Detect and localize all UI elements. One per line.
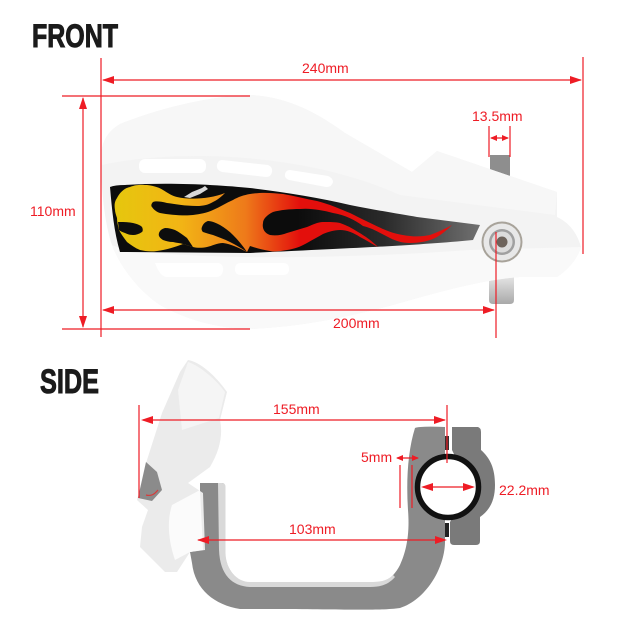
bolt [482, 222, 522, 262]
dimension: 200mm: 200mm [333, 315, 380, 331]
flame decal [110, 184, 480, 253]
clamp ring [418, 456, 478, 518]
silver bracket [190, 427, 445, 610]
flame cut-outs [118, 221, 247, 252]
dimension: 103mm [197, 521, 447, 544]
dimension: 103mm: 103mm [289, 521, 336, 537]
dimension: 22.2mm [421, 482, 550, 498]
dimension: 13.5mm: 13.5mm [472, 108, 523, 124]
white guard shell [101, 95, 581, 329]
black decal background [110, 184, 480, 253]
side guard shell [137, 360, 227, 572]
dimension: 155mm [139, 401, 447, 498]
metal clamp tabs [489, 155, 514, 304]
dimension: 5mm [361, 449, 419, 508]
title: FRONT: FRONT [32, 18, 118, 54]
dimension: 240mm [101, 57, 583, 337]
clamp body [418, 427, 495, 545]
gloss highlight [184, 186, 208, 198]
dimension: 13.5mm [472, 108, 523, 157]
side view: handguard and bracket [137, 360, 495, 610]
guard vents [139, 159, 333, 277]
dimension: 22.2mm: 22.2mm [499, 482, 550, 498]
title: SIDE: SIDE [40, 363, 99, 401]
dimension: 110mm [30, 96, 250, 329]
dimension: 110mm: 110mm [30, 203, 76, 219]
dimension: 5mm: 5mm [361, 449, 392, 465]
guard shading bands [101, 95, 557, 215]
front view: handguard [101, 95, 581, 329]
flame [115, 185, 452, 252]
guard highlights [178, 362, 225, 430]
dimension: 200mm [102, 232, 496, 338]
dimension: 155mm: 155mm [273, 401, 320, 417]
dimension: 240mm: 240mm [302, 60, 349, 76]
